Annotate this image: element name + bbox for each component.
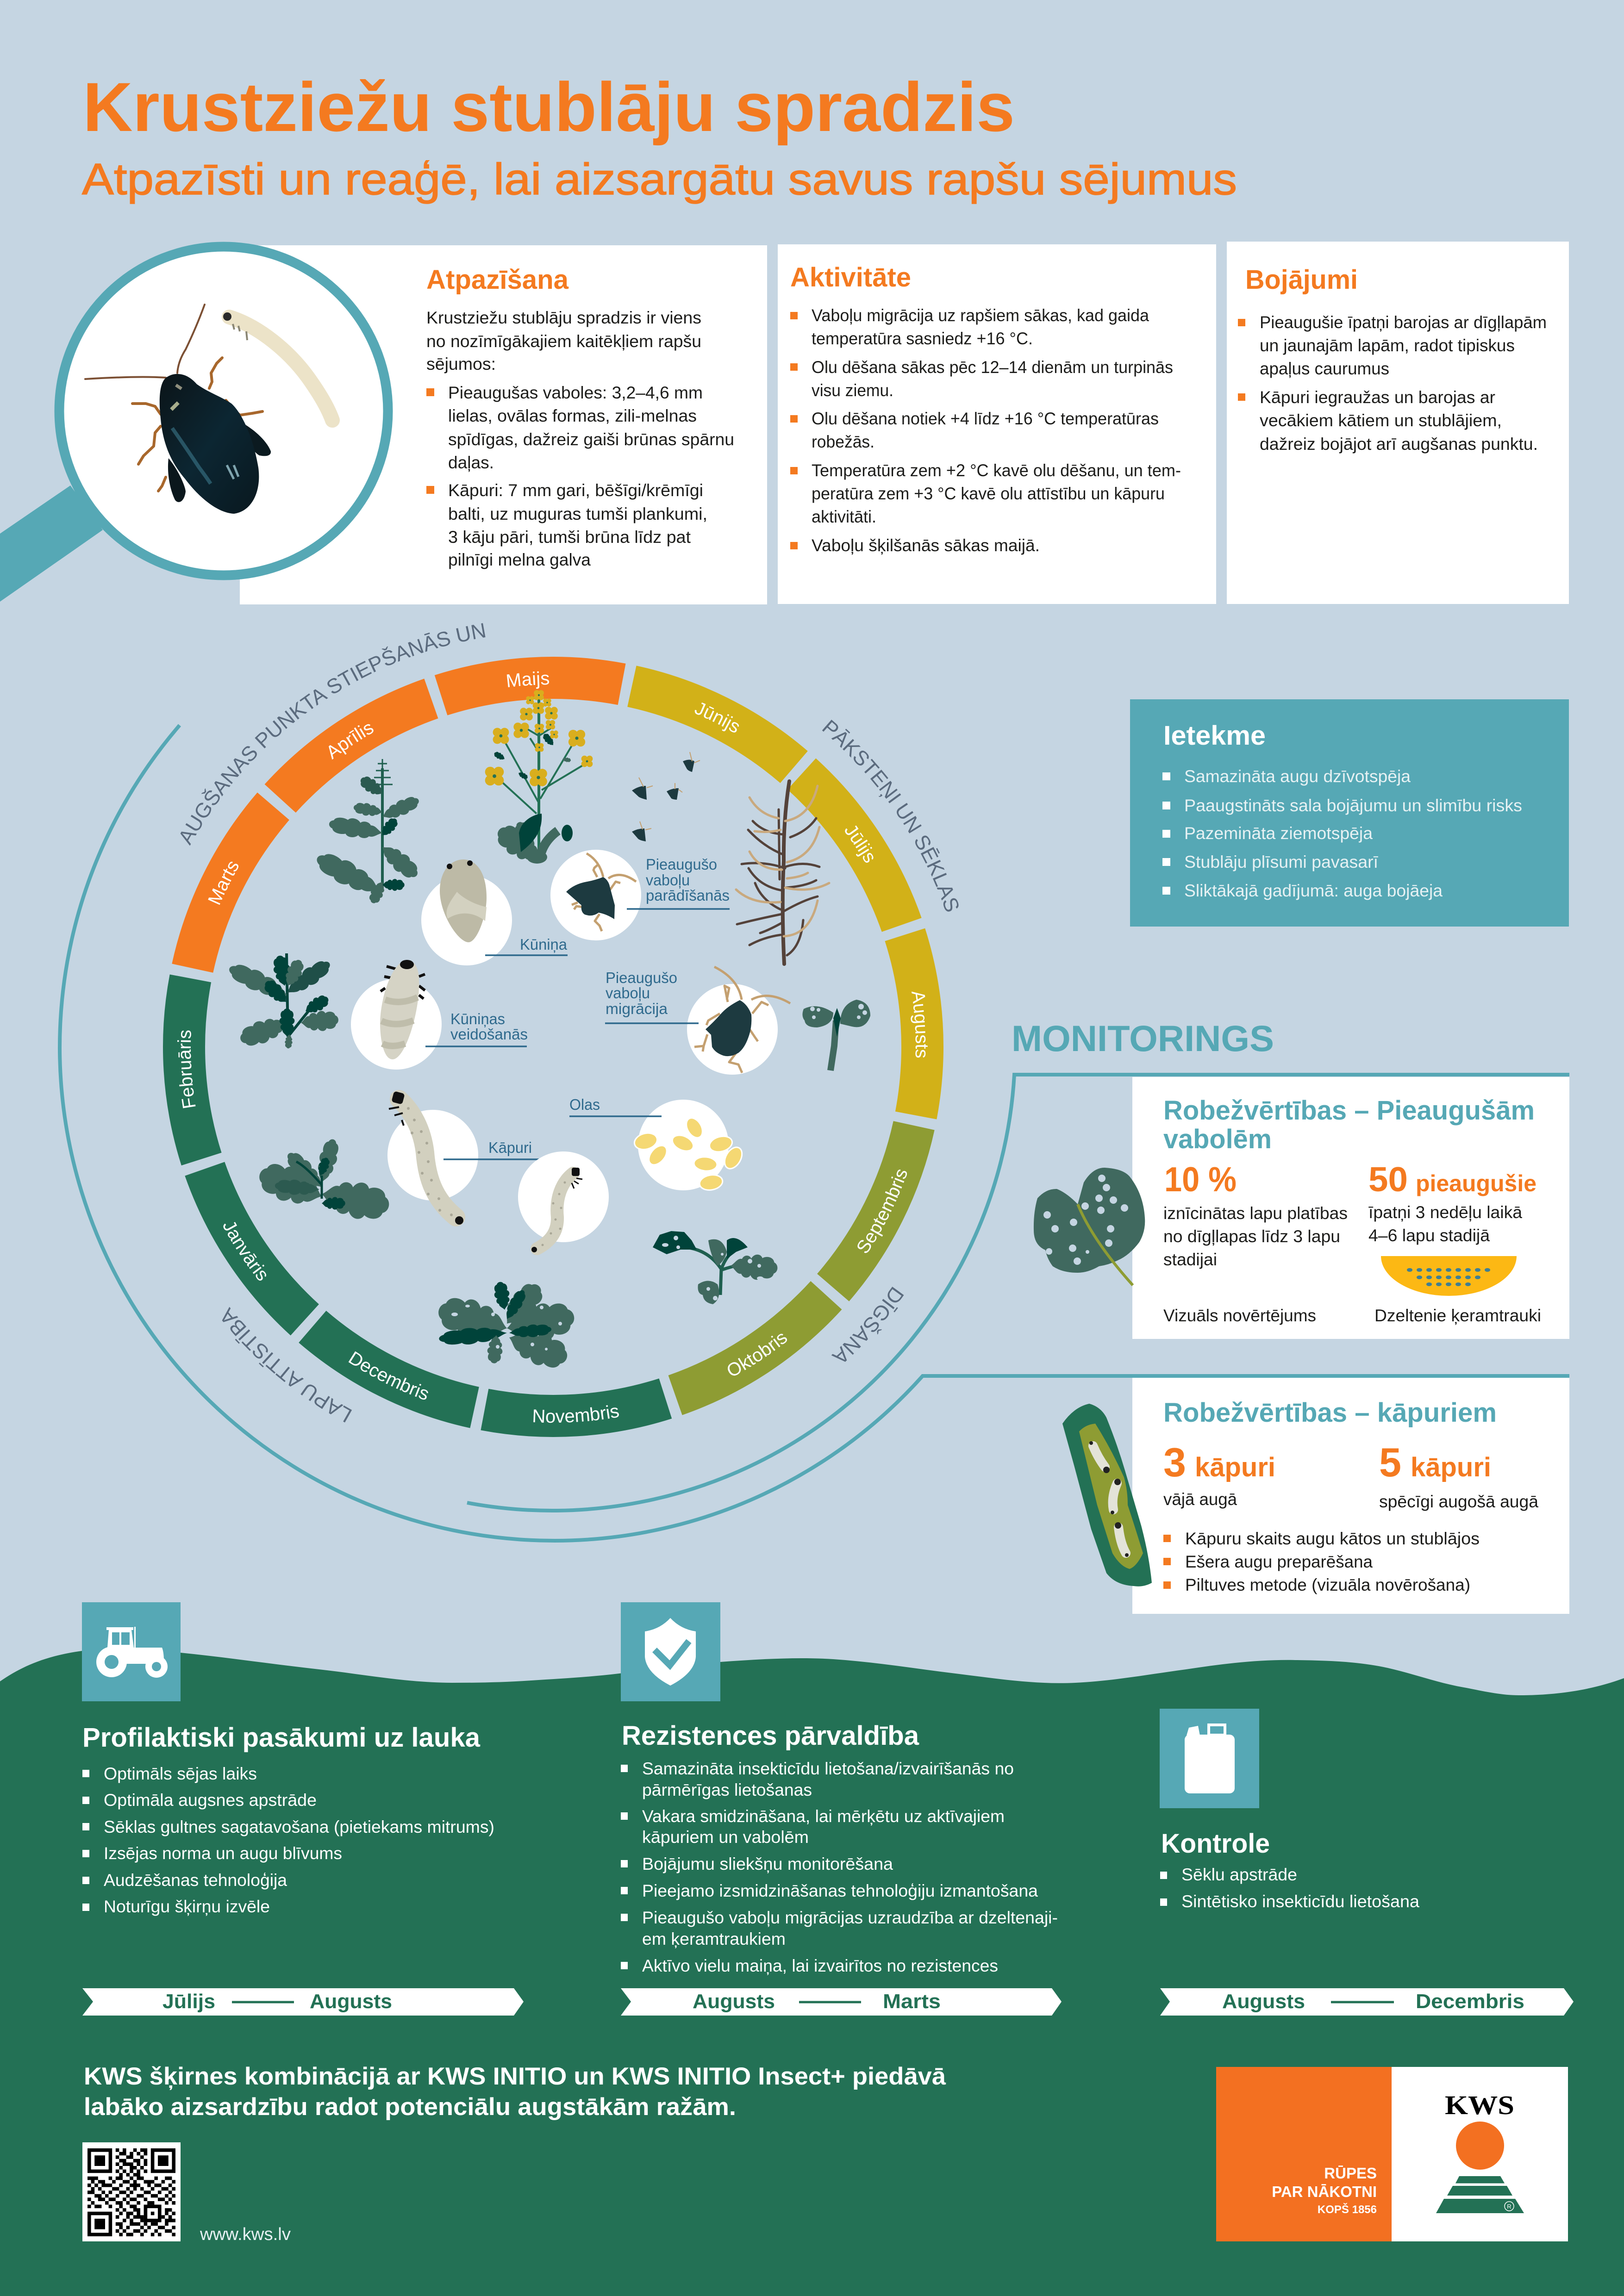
bullet list: damage: dažreiz bojājot arī augšanas punktu. [1260,434,1538,454]
stat: 50 pieaugušie: 4–6 lapu stadijā [1368,1226,1490,1245]
bullet list: damage: vecākiem kātiem un stublājiem, [1260,411,1502,430]
bullet list: damage: apaļus caurumus [1260,359,1389,378]
plant: November/December damaged [434,1277,577,1374]
bullet list: larvae monitoring: Ešera augu preparēšana [1185,1552,1373,1571]
heading: Bojājumi: Bojājumi [1245,265,1358,295]
month labels: Aprīlis [323,717,377,763]
heading: Kontrole [1161,1829,1270,1859]
stat: 3 kāpuri [1163,1439,1275,1509]
bullet list: impact: Samazināta augu dzīvotspēja [1184,766,1411,786]
panel: Bojājumi [1227,242,1569,604]
heading [1163,1095,1535,1154]
bullet list: impact: Stublāju plīsumi pavasarī [1184,852,1379,871]
month labels: Jūlijs [840,821,880,866]
bullet list: damage: Kāpuri iegraužas un barojas ar [1260,387,1495,407]
timing arrow: Augusts to Decembris [1160,1988,1574,2016]
bullet list: impact: Sliktākajā gadījumā: auga bojāeja [1184,881,1443,900]
lifecycle: pupation [351,960,442,1070]
column: resistance management [621,1721,1062,2016]
plant: August seedling [802,1000,870,1070]
stat: 50 pieaugušie [1368,1160,1537,1245]
label: Pieaugušo vaboļu parādīšanās: vaboļu [646,871,690,889]
outer stage labels [174,618,964,1427]
bullet list: identification: lielas, ovālas formas, zili-melnas [448,406,697,425]
closing statement: labāko aizsardzību radot potenciālu augstākām ražām. [84,2093,736,2121]
timing arrow: Jūlijs to Augusts [82,1988,524,2016]
bullet list: impact: Pazemināta ziemotspēja [1184,823,1373,843]
stat: 50 pieaugušie: 50 [1368,1160,1408,1199]
icon: stem with larvae [1062,1404,1152,1587]
bullet list: Sintētisko insekticīdu lietošana [1181,1892,1419,1911]
bullet list: activity: Olu dēšana notiek +4 līdz +16 °C temperatūras [812,409,1159,428]
stat: 3 kāpuri: vājā augā [1163,1489,1237,1509]
bullet list: Izsējas norma un augu blīvums [104,1843,342,1863]
label: Kūniņas veidošanās: veidošanās [450,1026,528,1043]
stat: 10 %: 10 % [1164,1160,1237,1199]
bullet list [1160,1865,1419,1911]
bullet list: damage: un jaunajām lapām, radot tipiskus [1260,336,1515,355]
month labels: Oktobris [723,1327,791,1381]
label: Pieaugušo vaboļu migrācija: migrācija [606,1000,668,1017]
stat: 5 kāpuri: kāpuri [1411,1452,1491,1482]
arc connector: inner, to vaboles card [467,1075,1569,1511]
icon: yellow trap [1381,1256,1517,1296]
label: Pieaugušo vaboļu migrācija: vaboļu [606,984,650,1002]
plant: October seedling [653,1231,778,1304]
stat: 5 kāpuri [1379,1439,1538,1511]
stat: 10 %: stadijai [1163,1250,1217,1269]
bullet list: larvae monitoring [1163,1529,1480,1594]
bullet list: activity: Vaboļu migrācija uz rapšiem sākas, kad gaida [812,305,1149,325]
timing arrow: Augusts to Marts: Marts [883,1990,941,2013]
bullet list: identification: 3 kāju pāri, tumši brūna līdz pat [448,527,691,547]
month labels: Jūnijs [692,698,744,737]
larva photo [223,312,332,420]
caption: Vizuāls novērtējums: Vizuāls novērtējums [1163,1306,1316,1325]
text block: intro: Krustziežu stublāju spradzis ir viens [426,308,701,327]
heading: Robežvērtības – Pieaugušām [1163,1095,1535,1126]
outer stage labels: PĀKSTEŅI UN SĒKLAS [818,715,964,915]
subtitle: Atpazīsti un reaģē, lai aizsargātu savus rapšu sējumus [82,155,1237,204]
bullet list: Pieaugušo vaboļu migrācijas uzraudzība ar dzeltenaji- [642,1908,1058,1927]
bullet list: Noturīgu šķirņu izvēle [104,1897,270,1916]
bullet list: damage: Pieaugušie īpatņi barojas ar dīgļlapām [1260,312,1547,332]
timing arrow: Jūlijs to Augusts: Augusts [310,1990,392,2013]
plant: February [225,953,339,1051]
label: Pieaugušo vaboļu parādīšanās: parādīšanās [646,887,730,904]
icon: tractor [82,1602,181,1701]
slogan [1272,2165,1377,2216]
panel: Atpazīšana [240,245,767,604]
bullet list: larvae monitoring: Piltuves metode (vizuāla novērošana) [1185,1575,1470,1594]
label: Olas: Olas [569,1096,600,1113]
lifecycle: pupa [421,859,512,965]
month labels: Marts [204,857,244,908]
bullet list: activity: Temperatūra zem +2 °C kavē olu dēšanu, un tem- [812,460,1181,480]
logo symbol: R [1507,2203,1512,2210]
plant: January [254,1137,392,1224]
text block: intro: no nozīmīgākajiem kaitēkļiem rapšu [426,331,701,351]
lifecycle: larva small [518,1151,609,1252]
bullet list: identification: Pieaugušas vaboles: 3,2–4,6 mm [448,383,703,402]
plant: July dry seed stems [736,781,829,964]
slogan: KOPŠ 1856 [1318,2203,1377,2216]
lifecycle calendar ring [174,618,964,1427]
closing statement: KWS šķirnes kombinācijā ar KWS INITIO un KWS INITIO Insect+ piedāvā [84,2063,946,2090]
month labels [175,668,932,1427]
timing arrow: Augusts to Decembris: Decembris [1416,1990,1524,2013]
bullet list: impact [1162,766,1522,900]
timing arrow: Augusts to Decembris: Augusts [1222,1990,1305,2013]
magnifier handle [0,485,103,602]
heading: MONITORINGS: MONITORINGS [1012,1018,1274,1059]
stat: 10 %: no dīgļlapas līdz 3 lapu [1163,1226,1340,1246]
label: Pieaugušo vaboļu migrācija: Pieaugušo [606,969,677,986]
stat: 3 kāpuri: kāpuri [1195,1452,1275,1482]
timing arrow: Jūlijs to Augusts: Jūlijs [162,1990,215,2013]
stat: 5 kāpuri: spēcīgi augošā augā [1379,1492,1538,1511]
bullet list [82,1764,494,1916]
panel: thresholds for adult beetles [1132,1077,1569,1339]
title: Krustziežu stublāju spradzis [83,68,1015,146]
QR code [82,2142,181,2241]
bullet list: Sēklu apstrāde [1181,1865,1297,1884]
bullet list: kāpuriem un vabolēm [642,1827,809,1847]
bullet list: activity [790,305,1181,555]
bullet list: activity: temperatūra sasniedz +16 °C. [812,329,1033,348]
stat: 5 kāpuri: 5 [1379,1439,1401,1485]
label: Kūniņa: Kūniņa [520,936,568,953]
KWS logo block [1216,2067,1568,2241]
website: www.kws.lv [200,2225,291,2244]
bullet list: activity: robežās. [812,432,874,451]
bullet list: identification [426,383,734,569]
heading: Ietekme: Ietekme [1163,721,1266,751]
slogan: PAR NĀKOTNI [1272,2183,1377,2200]
lifecycle: eggs [632,1100,745,1192]
ring segments [184,678,922,1416]
bullet list: larvae monitoring: Kāpuru skaits augu kātos un stublājos [1185,1529,1480,1548]
bullet list: activity: visu ziemu. [812,380,893,400]
label: Kūniņas veidošanās [425,1010,528,1046]
logo symbol [1436,2122,1524,2213]
timing arrow: Augusts to Marts: Augusts [693,1990,775,2013]
panel: Ietekme [1130,699,1569,927]
slogan: RŪPES [1324,2165,1377,2182]
lifecycle: adult emergence [550,850,641,940]
plant: May flowering rapeseed [485,690,593,869]
bullet list [621,1759,1058,1975]
icon: damaged leaf [1034,1168,1145,1285]
bullet list: em ķeramtraukiem [642,1929,786,1948]
bullet list: impact: Paaugstināts sala bojājumu un slimību risks [1184,796,1522,815]
plant: April stem elongation [312,759,423,906]
month labels: Novembris [532,1401,621,1427]
column: field prevention [82,1723,524,2016]
bullet list: Aktīvo vielu maiņa, lai izvairītos no rezistences [642,1956,998,1975]
heading: vabolēm [1163,1124,1272,1154]
stat: 3 kāpuri: 3 [1163,1439,1186,1485]
label: Kāpuri: Kāpuri [488,1139,532,1156]
outer stage labels: LAPU ATTĪSTĪBA [215,1304,356,1427]
heading: Aktivitāte: Aktivitāte [790,262,911,292]
stat: 50 pieaugušie: pieaugušie [1416,1170,1537,1196]
bullet list: Bojājumu sliekšņu monitorēšana [642,1854,893,1873]
text block: intro [426,308,701,373]
month labels: Februāris [175,1029,200,1110]
bullet list: Optimāls sējas laiks [104,1764,257,1783]
heading: Profilaktiski pasākumi uz lauka [82,1723,481,1753]
bullet list: Samazināta insekticīdu lietošana/izvairīšanās no [642,1759,1014,1778]
label: Kūniņas veidošanās: Kūniņas [450,1010,505,1027]
bullet list: identification: daļas. [448,453,494,472]
label: Pieaugušo vaboļu parādīšanās [627,856,730,909]
bullet list: activity: Olu dēšana sākas pēc 12–14 dienām un turpinās [812,357,1173,377]
beetle photo [85,305,271,514]
stat: 10 % [1163,1160,1348,1269]
bullet list: identification: spīdīgas, dažreiz gaiši brūnas spārnu [448,429,734,449]
caption: Dzeltenie ķeramtrauki: Dzeltenie ķeramtrauki [1374,1306,1541,1325]
icon: canister [1160,1709,1259,1808]
bullet list: activity: aktivitāti. [812,507,876,526]
label: Pieaugušo vaboļu parādīšanās: Pieaugušo [646,856,717,873]
lifecycle: adult migration [687,967,790,1075]
month labels: Janvāris [219,1217,273,1285]
bullet list: Sēklas gultnes sagatavošana (pietiekams mitrums) [104,1817,494,1836]
bullet list: Optimāla augsnes apstrāde [104,1790,317,1810]
stat: 50 pieaugušie: īpatņi 3 nedēļu laikā [1368,1202,1522,1222]
month labels: Septembris [853,1166,912,1257]
bullet list: identification: pilnīgi melna galva [448,550,591,569]
lifecycle: larva large [387,1091,478,1225]
magnifier lens [59,247,388,575]
bullet list: Vakara smidzināšana, lai mērķētu uz aktīvajiem [642,1806,1005,1826]
closing statement [84,2063,946,2121]
panel: Aktivitāte [778,244,1216,604]
icon: magnifying glass with beetle and larva [0,247,388,602]
heading: Rezistences pārvaldība [622,1721,919,1751]
flying beetles [632,752,700,841]
icon: shield with check [621,1602,720,1701]
outer stage labels: AUGŠANAS PUNKTA STIEPŠANĀS UN [174,618,488,848]
timing arrow: Augusts to Marts [621,1988,1062,2016]
bullet list: identification: Kāpuri: 7 mm gari, bēšīgi/krēmīgi [448,480,703,500]
bullet list: activity: Vaboļu šķilšanās sākas maijā. [812,535,1040,555]
heading: Atpazīšana: Atpazīšana [426,265,569,295]
panel: thresholds for larvae [1132,1378,1569,1614]
month labels: Decembris [345,1348,432,1405]
heading: Robežvērtības – kāpuriem [1163,1398,1497,1428]
bullet list: activity: peratūra zem +3 °C kavē olu attīstību un kāpuru [812,484,1165,503]
stat: 10 %: iznīcinātas lapu platības [1163,1203,1348,1223]
text block: intro: sējumos: [426,354,496,373]
label: Pieaugušo vaboļu migrācija [605,969,699,1023]
outer stage labels: DĪGŠANA [828,1282,909,1369]
green wave footer background [0,1648,1624,2296]
month labels: Augusts [907,989,932,1058]
KWS wordmark: KWS [1445,2090,1514,2120]
bullet list: damage [1238,312,1547,454]
bullet list: Pieejamo izsmidzināšanas tehnoloģiju izmantošana [642,1881,1038,1900]
bullet list: Audzēšanas tehnoloģija [104,1870,287,1890]
month labels: Maijs [505,668,550,691]
bullet list: identification: balti, uz muguras tumši plankumi, [448,504,707,523]
bullet list: pārmērīgas lietošanas [642,1780,812,1799]
column: control [1160,1829,1574,2016]
arc connector: outer, to kāpuri card [60,725,1569,1541]
